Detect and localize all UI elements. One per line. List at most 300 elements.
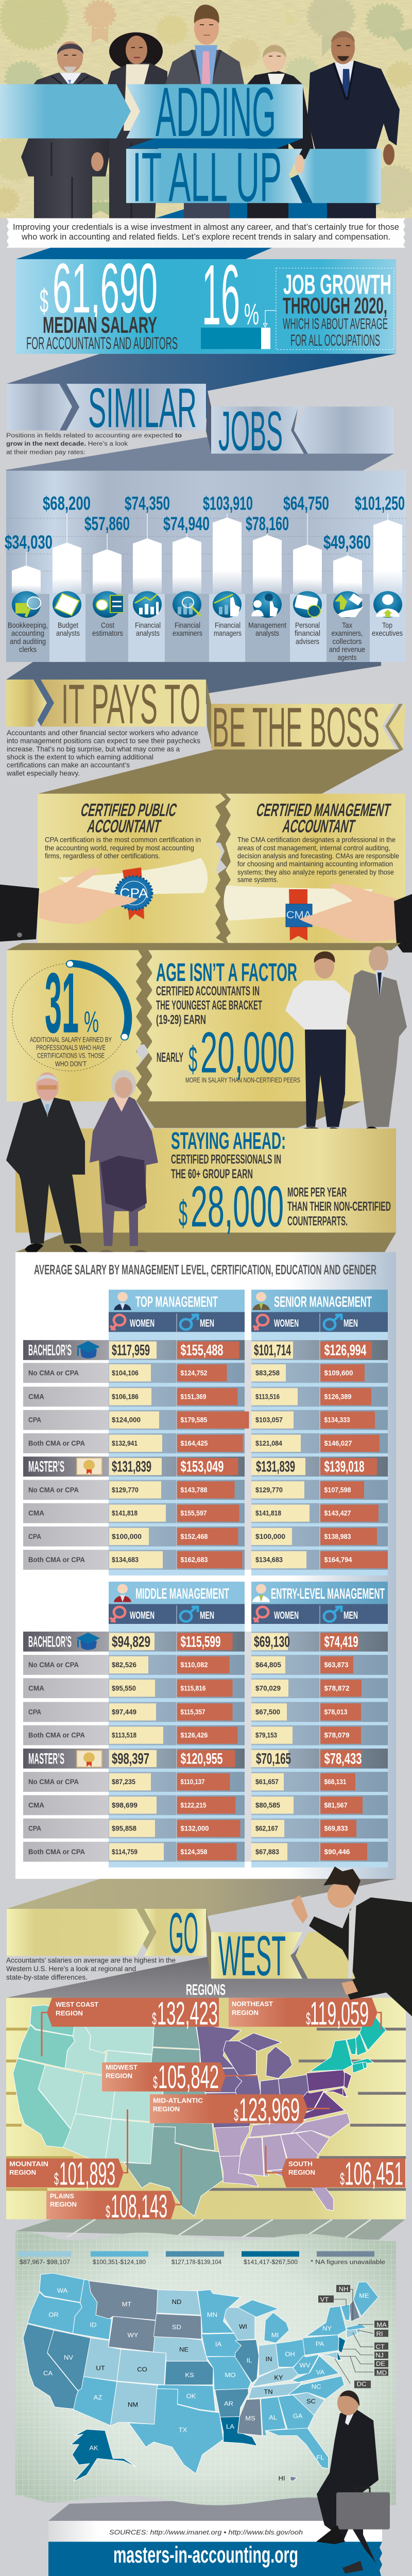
CMA diploma: CMA [286,909,312,921]
women bars [109,1633,294,1860]
values: senior management men [324,1342,367,1564]
state labels: SD [172,2324,181,2331]
job labels: collectors [333,637,362,646]
callout: plains: $ [106,2202,110,2222]
callout: west coast: REGION [56,2009,83,2017]
values: middle management men: $122,215 [180,1802,207,1809]
row labels: No CMA or CPA [28,1486,79,1494]
legend: * NA figures unavailable [311,2259,385,2265]
values: middle management women: $94,829 [112,1633,150,1650]
state labels: IA [215,2341,222,2348]
callout: mountain: MOUNTAIN [9,2160,48,2167]
state labels: CA [43,2370,53,2377]
values: top management men: $179,585 [180,1416,208,1425]
callout: mid-atlantic: 123,969 [239,2092,300,2128]
state labels: AR [224,2400,233,2407]
values: top management women: $104,106 [112,1369,139,1377]
values: top management men: $143,788 [180,1486,208,1494]
values: middle management women: $82,526 [112,1662,136,1669]
group of five business people [21,5,400,218]
values: senior management men: $164,794 [324,1556,352,1564]
state labels: TX [179,2427,187,2433]
values: middle management women: $113,518 [112,1732,136,1740]
callout: mid-atlantic [150,2092,307,2128]
rows: top and senior management [23,1332,388,1572]
table header: middle and entry-level management [109,1582,388,1868]
similar jobs ribbon: JOBS [218,400,283,463]
boss section description: shock is the extent to which earning additional [7,753,153,761]
boss section description: into management positions can expect to see their paychecks [7,737,200,745]
icon: diploma [77,1751,102,1767]
values: top management women: $100,000 [112,1533,142,1541]
state labels: NM [128,2401,138,2408]
callout: west coast: WEST COAST [56,2001,98,2008]
values: middle management men: $132,000 [180,1825,209,1833]
job labels: analysts [56,630,80,638]
US regions map [13,2005,386,2216]
small state tags: DC [357,2381,366,2388]
connector lines [42,2012,381,2205]
values: top management women: $141,818 [112,1510,138,1518]
bar values: $74,350 [125,493,170,514]
state labels: OR [48,2311,59,2318]
boss section description: Accountants and other financial sector workers who advance [7,729,198,737]
callout: plains: 108,143 [111,2188,167,2224]
bar values: $78,160 [246,514,289,535]
title ribbon: ADDING IT ALL UP [0,73,381,216]
gender headings [110,1313,358,1332]
legend: $127,178-$139,104 [171,2259,221,2265]
small state tags: RI [376,2330,383,2337]
job labels: accounting [11,630,44,638]
CPA diploma: CPA [119,886,148,901]
job labels: clerks [19,646,37,654]
icon: graduation cap [76,1341,100,1359]
state labels: MN [207,2311,217,2318]
row labels: BACHELOR’S [28,1633,72,1650]
job labels: advisers [296,637,319,646]
women bars [109,1342,310,1568]
row labels: MASTER’S [28,1750,64,1767]
person icon [114,1584,131,1602]
age isn't a factor text: CERTIFIED ACCOUNTANTS IN [156,984,260,998]
callout: west coast: $ [152,2010,157,2028]
values: top management women: $132,941 [112,1439,138,1448]
values: middle management men: $115,599 [180,1633,221,1650]
stems [26,514,388,565]
callout: midwest: $ [153,2073,158,2092]
person icon [252,1292,270,1310]
regions map panel: 132,423 [157,1995,218,2031]
values: middle management women: $114,759 [112,1848,138,1856]
boss section description: wallet especially heavy. [6,769,80,777]
31 percent statistic: ADDITIONAL SALARY EARNED BY [30,1036,112,1044]
values: entry-level men: $81,567 [324,1802,348,1809]
callout: mountain: 101,893 [59,2156,115,2192]
small state tags: VT [320,2296,329,2303]
callout: midwest [102,2059,226,2095]
state labels: ID [90,2321,96,2328]
table header: middle and entry-level management: MIDDLE MANAGEMENT [135,1586,229,1602]
legend: $141,417-$267,500 [244,2259,298,2265]
state labels: UT [96,2365,105,2371]
job labels: Financial [135,621,161,630]
state labels: MI [271,2332,279,2339]
illustration: older man and woman [6,1070,158,1257]
values: middle management women [112,1633,150,1856]
31 percent statistic [12,955,128,1071]
arrow [263,311,276,327]
state labels: PA [316,2341,324,2347]
row labels: Both CMA or CPA [28,1439,85,1448]
gender headings: WOMEN [274,1610,299,1621]
values: top management men: $155,597 [180,1510,207,1518]
job labels: executives [372,630,403,638]
values: entry-level women: $67,500 [255,1708,280,1716]
callout: plains: PLAINS [50,2193,74,2200]
job growth percent: % [244,298,259,331]
boss section description: increase. That’s no big surprise, but what may come as a [7,745,180,753]
values: senior management women: $113,516 [255,1393,280,1401]
values: middle management women: $87,235 [112,1778,135,1786]
CMA diploma [224,886,373,941]
legend [18,2251,385,2265]
values: top management men: $164,425 [180,1439,208,1448]
row labels: CMA [28,1685,45,1692]
state labels: MT [122,2301,132,2308]
values: middle management men: $115,816 [180,1685,206,1692]
gender headings: WOMEN [130,1610,154,1621]
state labels: IN [266,2355,272,2363]
certification panels [0,794,412,953]
state labels: GA [293,2413,303,2419]
job labels: Bookkeeping, [8,621,48,630]
small state tags [318,2285,388,2388]
callout: south: REGION [288,2168,315,2176]
job labels: Tax [342,621,352,630]
median salary [26,249,178,353]
callout: northeast [229,1995,377,2031]
small state tags: CT [375,2343,385,2350]
callout: mid-atlantic: $ [234,2106,238,2125]
median salary: $ [40,283,48,320]
values: entry-level men: $74,419 [324,1633,358,1650]
values: senior management women: $134,683 [255,1556,283,1564]
job labels: examiners [173,630,202,638]
values: entry-level men: $69,833 [324,1825,348,1833]
boss section description [6,729,200,777]
values: entry-level women: $79,153 [255,1732,277,1740]
legend: $87,967- $98,107 [20,2259,70,2265]
age isn't a factor text: NEARLY [157,1050,183,1065]
similar jobs description: at their median pay rates: [6,449,85,455]
values: middle management men: $126,426 [180,1732,208,1740]
bar values: $68,200 [43,493,91,514]
row labels: MASTER’S [28,1458,64,1475]
staying ahead panel: MORE PER YEAR [287,1184,347,1199]
job labels: Budget [58,621,79,630]
small state tags: MA [376,2321,387,2328]
illustration: man with briefcase [316,2391,390,2573]
values: middle management women: $98,397 [112,1750,149,1767]
panel: CPA: ACCOUNTANT [85,816,163,836]
callout: plains: REGION [50,2200,77,2208]
go west description [6,1956,176,1981]
age isn't a factor text: (19-29) EARN [156,1012,206,1027]
values: top management women: $134,683 [112,1556,139,1564]
staying ahead panel: COUNTERPARTS. [287,1214,348,1228]
callout: midwest: MIDWEST [106,2063,138,2071]
age isn't a factor text: MORE IN SALARY THAN NON-CERTIFIED PEERS [185,1076,300,1084]
callout: mid-atlantic: MID-ATLANTIC [153,2097,203,2104]
person icon [252,1584,270,1602]
values: top management men: $124,752 [180,1369,208,1377]
values: senior management men: $146,027 [324,1439,352,1448]
callout: south: $ [340,2170,345,2189]
state labels [43,2287,369,2482]
job icons [12,591,402,618]
go west description: Accountants’ salaries on average are the highest in the [6,1956,176,1964]
staying ahead panel: CERTIFIED PROFESSIONALS IN [171,1152,281,1166]
job labels: analysts [255,630,279,638]
callout: midwest: REGION [106,2072,132,2079]
values: senior management men: $126,994 [324,1342,367,1359]
values: senior management women: $101,714 [254,1342,291,1359]
gender headings: WOMEN [274,1318,299,1329]
values: top management women: $124,000 [112,1416,141,1425]
values: top management men [180,1342,224,1564]
values: senior management women: $129,770 [255,1486,283,1494]
person icon [114,1292,131,1310]
hand handing CMA diploma [299,884,412,953]
values: middle management men: $110,082 [180,1662,208,1669]
icon: diploma [77,1458,102,1475]
row labels: Both CMA or CPA [28,1848,85,1856]
state labels: ND [172,2298,181,2306]
bar values: $74,940 [163,514,210,535]
row labels: CMA [28,1393,45,1401]
US state map [23,2273,379,2481]
values: top management men: $152,468 [180,1533,208,1541]
values: entry-level women: $69,130 [254,1633,290,1650]
men bars [177,1633,367,1860]
it pays to be the boss ribbon [6,662,405,794]
row labels [28,1342,85,1564]
values: senior management women: $103,057 [255,1416,283,1425]
state labels: AZ [94,2394,102,2401]
row labels: CPA [28,1416,41,1425]
similar jobs description: Positions in fields related to accounting are expected to [6,432,182,439]
callout: mid-atlantic: REGION [153,2106,180,2113]
state labels: KS [185,2372,194,2379]
values: entry-level men: $78,079 [324,1732,350,1740]
state labels: AK [89,2445,98,2451]
row labels: Both CMA or CPA [28,1556,85,1564]
values: senior management men: $109,600 [324,1369,353,1377]
state labels: HI [279,2475,285,2482]
state labels: MO [225,2372,236,2379]
age isn't a factor text: THE YOUNGEST AGE BRACKET [156,998,262,1012]
values: top management men: $151,369 [180,1393,207,1401]
bar values [5,493,405,553]
small state tags: DE [376,2360,385,2367]
callout: mountain: REGION [9,2168,36,2176]
table header: top and senior management: TOP MANAGEMENT [135,1294,218,1310]
job labels: examiners, [332,630,363,638]
illustration: pointing man [291,1867,412,2016]
panel: CMA: areas of cost management, internal control auditing, [237,844,390,852]
go west description: state-by-state differences. [6,1973,88,1981]
state labels: FL [316,2454,324,2461]
values: entry-level women: $70,165 [256,1750,291,1767]
values: entry-level men [324,1633,362,1856]
gender headings [110,1605,358,1624]
hand handing CPA diploma [0,868,138,942]
values: entry-level men: $78,433 [324,1750,362,1767]
job growth box [276,268,394,349]
sources: SOURCES: http://www.imanet.org • http://www.bls.gov/ooh [109,2529,303,2536]
row labels: Both CMA or CPA [28,1732,85,1740]
panel: CMA: for choosing and maintaining accounting information [237,860,393,868]
staying ahead panel [15,1128,396,1252]
regions heading: REGIONS [186,1981,226,1998]
values: senior management women: $83,258 [255,1369,280,1377]
bar values: $49,360 [323,532,371,553]
job labels: Management [248,621,287,630]
values: senior management women: $141,818 [255,1510,281,1518]
state labels: KY [274,2374,283,2381]
callout: plains [46,2188,176,2224]
31 percent statistic: PROFESSIONALS WHO HAVE [36,1044,106,1052]
staying ahead panel: 28,000 [191,1174,284,1239]
values: senior management women: $100,000 [255,1533,285,1541]
values: top management women: $129,770 [112,1486,139,1494]
state labels: SC [306,2398,316,2405]
men bars [177,1342,388,1568]
state labels: ME [359,2292,369,2299]
row labels: CPA [28,1825,41,1833]
bars [12,517,402,594]
gender headings: MEN [200,1318,214,1329]
row labels: No CMA or CPA [28,1662,79,1669]
CPA diploma [58,858,208,920]
31 percent statistic: WHO DON’T [55,1060,87,1068]
gender headings: MEN [200,1610,214,1621]
values: top management men: $153,049 [180,1458,224,1475]
callout: northeast: NORTHEAST [232,2001,273,2008]
values: senior management men: $107,598 [324,1486,351,1494]
job labels: and auditing [10,637,46,646]
panel: CPA: CERTIFIED PUBLIC [79,800,179,820]
row labels: CPA [28,1533,41,1541]
go west ribbon: GO [169,1901,198,1965]
panel: CMA [224,800,412,953]
table header: top and senior management [109,1290,388,1575]
values: top management men: $162,683 [180,1556,208,1564]
state labels: IL [247,2357,252,2364]
row labels: CPA [28,1708,41,1716]
values: senior management men: $139,018 [324,1458,365,1475]
callout: northeast: $ [306,2010,311,2028]
age isn't a factor text [156,958,300,1084]
state labels: AL [269,2414,277,2421]
state labels: CO [137,2366,147,2373]
state labels: NE [179,2346,188,2353]
callout: west coast [47,1995,219,2031]
job labels: agents [338,654,357,662]
values: middle management men [180,1633,222,1856]
values: senior management women: $121,084 [255,1439,282,1448]
go west description: Western U.S. Here’s a look at regional and [6,1964,136,1973]
go west ribbon: WEST [218,1924,286,1988]
row labels: No CMA or CPA [28,1778,79,1786]
age isn't a factor text: 20,000 [200,1020,295,1084]
values: entry-level women: $67,883 [255,1848,279,1856]
job labels: Financial [175,621,200,630]
job labels: estimators [92,630,123,638]
age isn't a factor text: $ [188,1040,197,1080]
state salary map panel [15,2219,405,2521]
median salary: 61,690 [53,249,158,328]
values: middle management women: $95,550 [112,1685,136,1692]
values: entry-level men: $90,446 [324,1848,350,1856]
person hand over ribbon [295,155,304,174]
row labels: CMA [28,1510,45,1518]
similar jobs description [0,430,208,455]
values: entry-level men: $78,013 [324,1708,348,1716]
values: entry-level men: $63,873 [324,1662,349,1669]
gender headings: MEN [344,1610,358,1621]
callout: northeast: REGION [232,2009,259,2016]
values: middle management men: $115,357 [180,1708,205,1716]
values: middle management men: $124,358 [180,1848,208,1856]
state labels: MS [245,2415,255,2422]
row labels [28,1633,85,1856]
values: middle management women: $95,858 [112,1825,136,1833]
intro strip: who work in accounting and related fields. Let’s explore recent trends in salary and compensation. [21,232,390,242]
bar values: $57,860 [84,514,130,535]
salary tables panel [15,1252,396,1879]
job growth percent: 16 [202,247,240,343]
values: middle management women: $98,699 [112,1802,138,1809]
bar values: $64,750 [283,493,329,514]
values: top management women: $131,839 [112,1458,151,1475]
state labels: TN [264,2388,273,2395]
callout: mountain: $ [54,2170,59,2189]
panel: CMA: The CMA certification designates a professional in the [237,836,396,844]
values: entry-level women: $61,657 [255,1778,279,1786]
values: senior management men: $143,427 [324,1510,351,1518]
regions map panel [6,1995,406,2224]
31 percent statistic: CERTIFICATIONS VS. THOSE [37,1052,105,1060]
job labels [8,621,403,662]
state labels: WI [239,2323,247,2330]
values: senior management men: $134,333 [324,1416,350,1425]
values: entry-level women: $80,585 [255,1802,280,1809]
bar values: $34,030 [5,532,53,553]
state labels: VA [316,2369,325,2376]
values: top management men: $155,488 [180,1342,224,1359]
values: top management women: $106,186 [112,1393,139,1401]
values: middle management men: $110,137 [180,1778,205,1786]
values: entry-level women: $62,167 [255,1825,278,1833]
illustration: young man and bald man [285,946,407,1140]
job labels: Cost [101,621,115,630]
small state tags: NH [339,2286,348,2293]
legend: $100,351-$124,180 [93,2259,146,2265]
job labels: Personal [295,621,320,630]
31 percent statistic: % [84,1005,99,1038]
